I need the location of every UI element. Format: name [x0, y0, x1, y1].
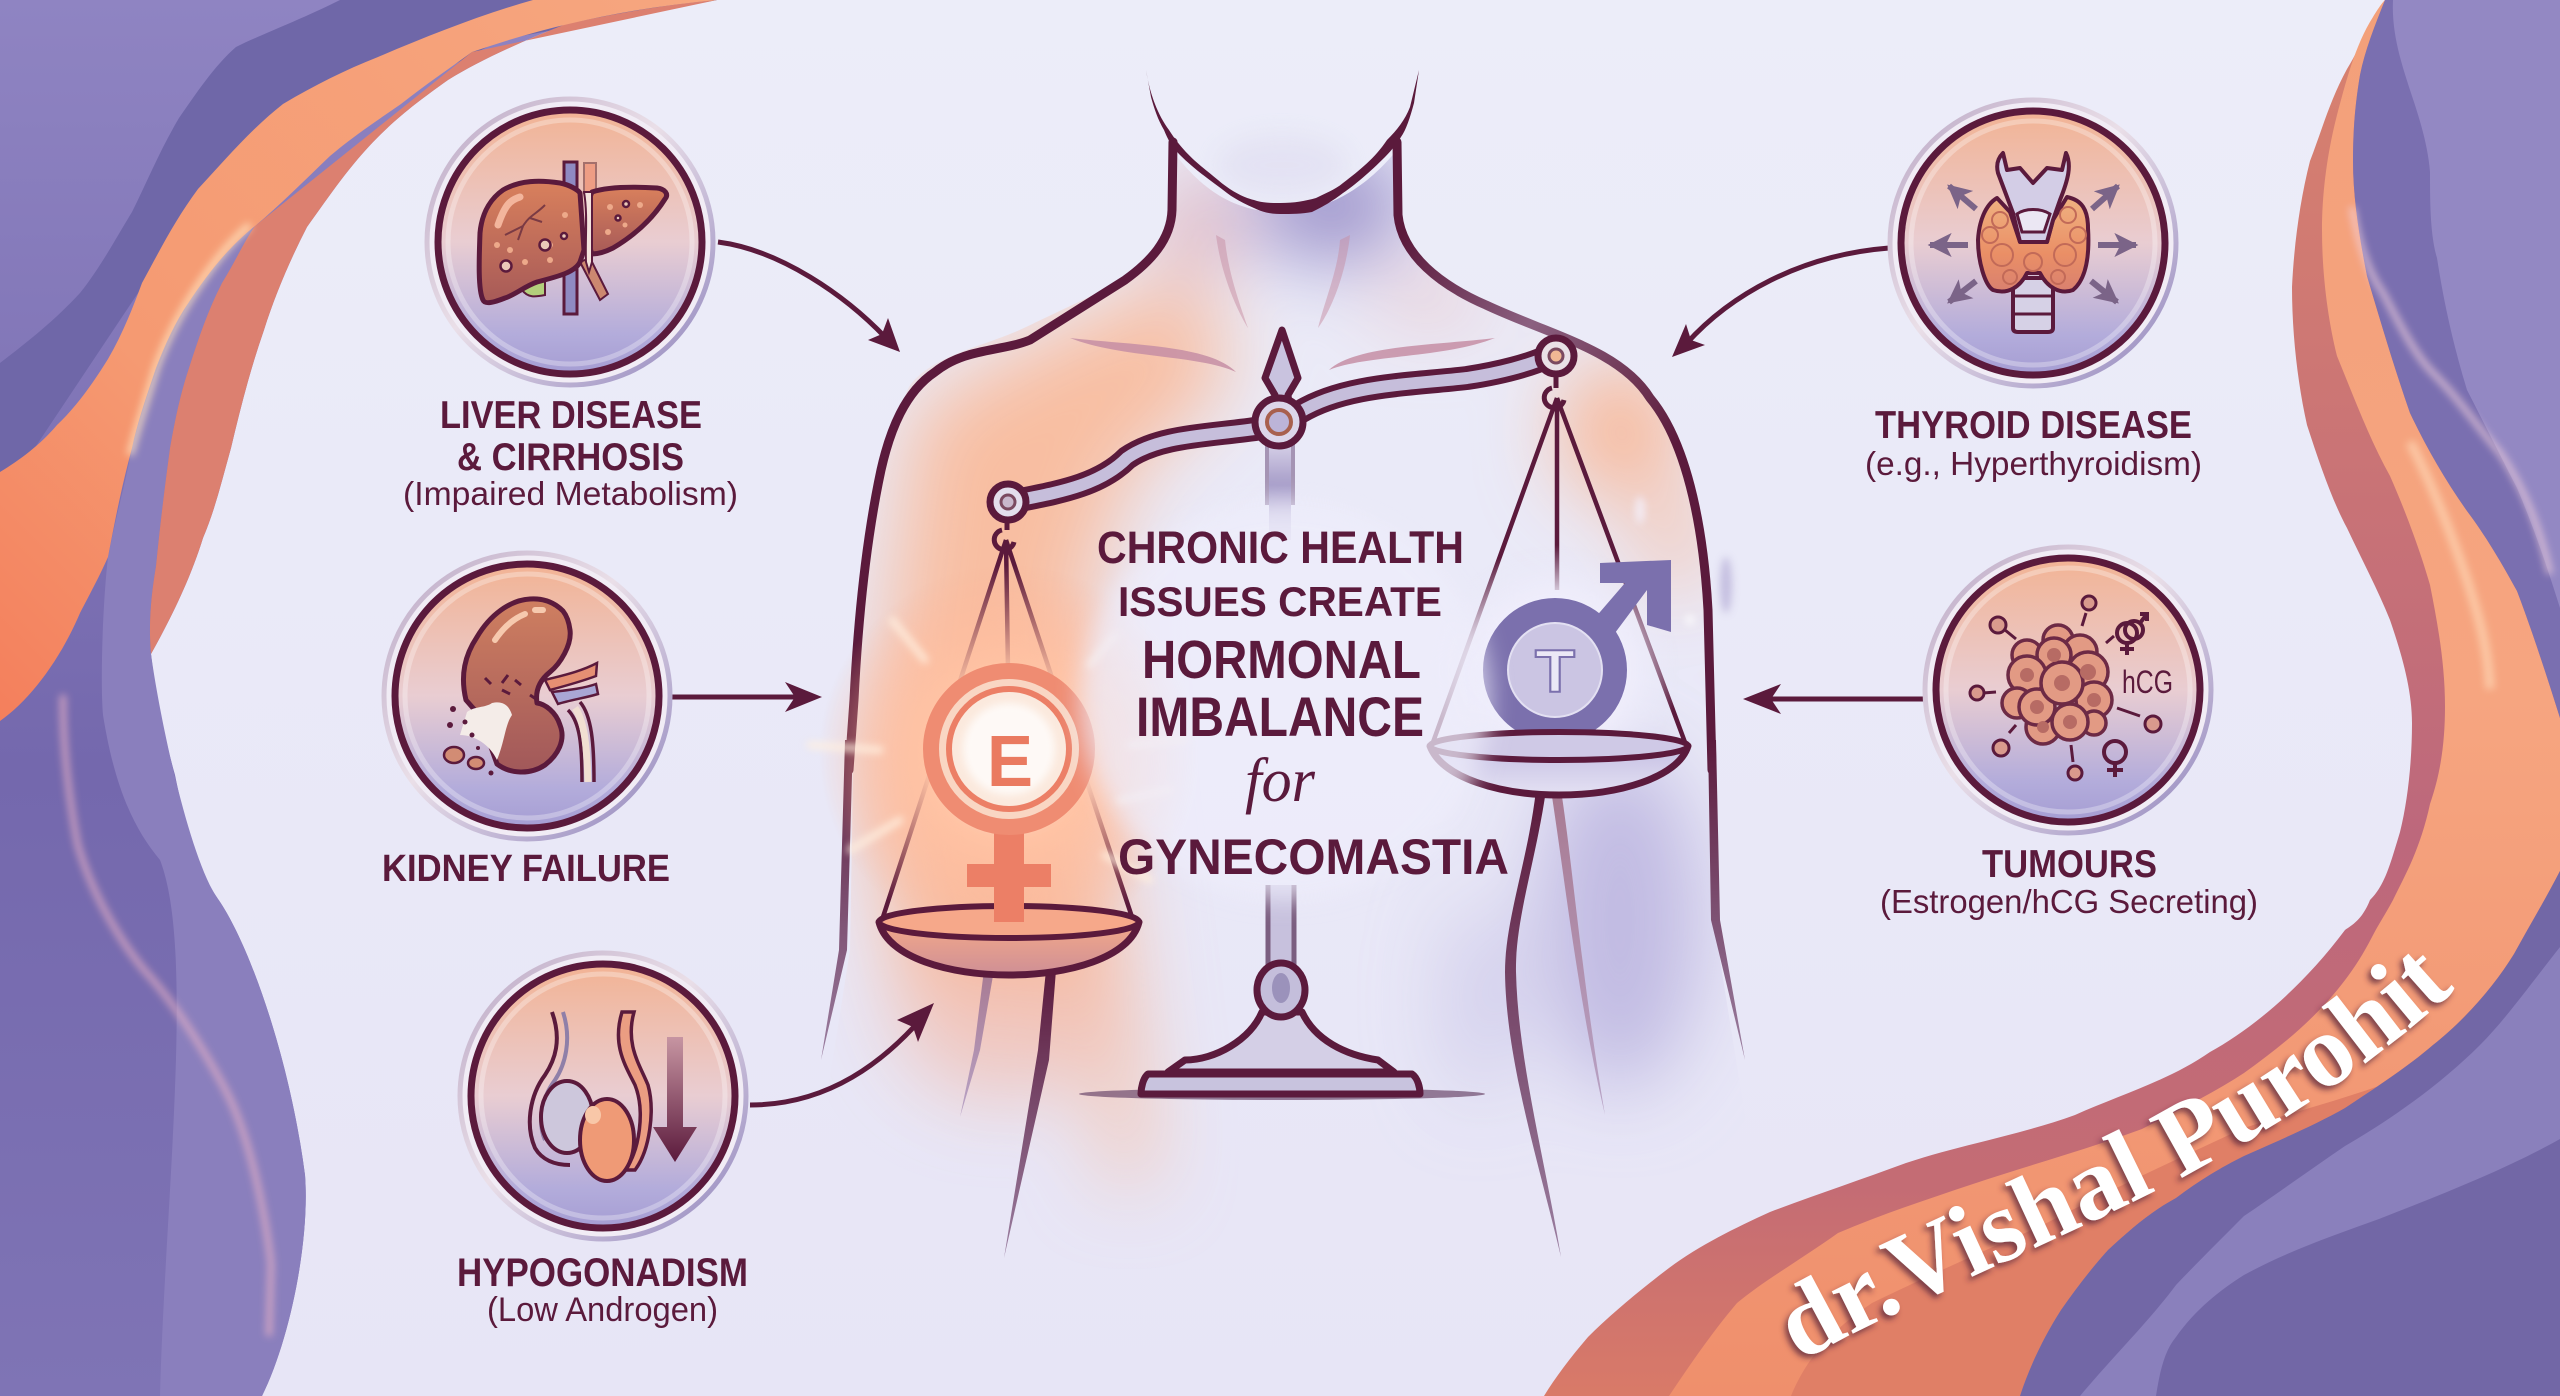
icon: female symbol: [2104, 741, 2126, 777]
panel: kidney failure: [382, 553, 670, 890]
right body outline: [1397, 142, 1712, 770]
neck shadow: [1217, 135, 1347, 195]
collarbones and neck tendons: [1070, 235, 1495, 372]
right scale pan: [1430, 732, 1688, 795]
neckline: [1146, 70, 1419, 214]
tumours label: [1880, 843, 2258, 920]
icon: liver: [479, 162, 667, 314]
panel: liver disease: [403, 99, 738, 512]
letter E: E: [987, 722, 1033, 802]
liver label: [403, 394, 738, 512]
thyroid label: [1865, 404, 2202, 482]
left decorative wave: [0, 0, 717, 1396]
icon: outward arrows: [1930, 186, 2136, 302]
badge: [427, 99, 713, 385]
arrow: hypogonadism: [750, 1003, 934, 1105]
central title: [1097, 522, 1509, 885]
panel: thyroid disease: [1865, 100, 2202, 482]
badge: [460, 953, 746, 1239]
central title: CHRONIC HEALTH: [1097, 522, 1464, 573]
beam ends and hooks: [990, 338, 1574, 550]
skin shading: [865, 150, 1705, 1180]
badge: [1890, 100, 2176, 386]
central title: HORMONAL: [1142, 630, 1421, 690]
icon: secreted particles: [1970, 596, 2161, 780]
thyroid label: THYROID DISEASE: [1875, 404, 2192, 447]
sparkles near testosterone: [1635, 496, 1732, 625]
hypogonadism label: HYPOGONADISM: [457, 1251, 748, 1295]
balance scale: [882, 330, 1686, 1100]
spire: [1265, 330, 1298, 412]
signature: dr.Vishal Purohit: dr.Vishal Purohit: [1781, 954, 2454, 1362]
icon: down arrow: [653, 1037, 697, 1162]
torso figure: [821, 70, 1745, 1258]
panel: hypogonadism: [457, 953, 748, 1329]
kidney label: KIDNEY FAILURE: [382, 848, 670, 890]
arrow: kidney: [672, 682, 822, 712]
liver label: & CIRRHOSIS: [457, 436, 684, 479]
arrow: liver: [718, 242, 900, 352]
right decorative wave: [1544, 0, 2560, 1396]
liver label: (Impaired Metabolism): [403, 475, 738, 512]
letter T: T: [1535, 638, 1575, 705]
scale beam: [1020, 356, 1550, 500]
central title: GYNECOMASTIA: [1118, 829, 1509, 885]
base: [1079, 963, 1485, 1100]
glow rays: [810, 620, 1185, 880]
arrow: tumours: [1743, 684, 1933, 714]
testosterone symbol: [1430, 545, 1680, 795]
hCG label in icon: hCG: [2122, 664, 2173, 700]
scale pole: [1267, 430, 1294, 975]
icon: testes: [530, 1012, 651, 1181]
hypogonadism label: [457, 1251, 748, 1329]
central title: for: [1245, 747, 1316, 815]
left body outline: [849, 142, 1173, 770]
panel: tumours: [1880, 547, 2258, 920]
tumours label: (Estrogen/hCG Secreting): [1880, 883, 2258, 920]
arm and torso lines: [821, 740, 1745, 1258]
thyroid label: (e.g., Hyperthyroidism): [1865, 445, 2202, 482]
pan strings: [882, 398, 1686, 920]
icon: mixed gender symbol: [2117, 614, 2147, 655]
arrows into figure: [672, 242, 1933, 1105]
arrow: thyroid: [1672, 248, 1889, 357]
estrogen symbol: [810, 565, 1199, 945]
liver label: LIVER DISEASE: [440, 394, 702, 437]
icon: thyroid: [1978, 153, 2088, 332]
tumours label: TUMOURS: [1982, 843, 2157, 886]
central title: ISSUES CREATE: [1118, 578, 1442, 625]
icon: kidney: [444, 599, 598, 782]
central pivot: [1255, 398, 1303, 446]
icon: tumour cell cluster: [2002, 625, 2112, 744]
badge: [384, 553, 670, 839]
hypogonadism label: (Low Androgen): [487, 1291, 718, 1329]
central text halo: [1080, 500, 1490, 900]
central title: IMBALANCE: [1136, 685, 1424, 748]
badge: [1925, 547, 2211, 833]
left scale pan: [879, 900, 1139, 975]
